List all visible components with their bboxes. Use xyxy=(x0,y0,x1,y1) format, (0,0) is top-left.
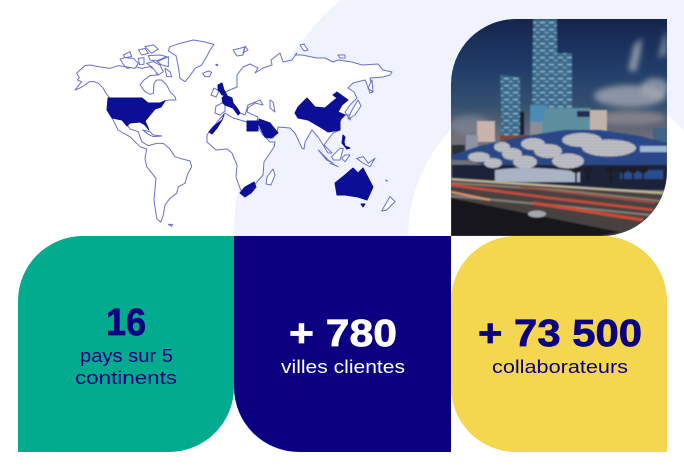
map: highlighted countries xyxy=(107,83,373,207)
map: Africa xyxy=(207,113,275,195)
map: Northern islands and inland seas xyxy=(211,44,345,112)
map: Madagascar xyxy=(266,169,275,185)
label: villes clientes: villes clientes xyxy=(281,356,405,377)
label: pays sur 5 continents xyxy=(75,345,177,388)
map: North America xyxy=(75,40,218,103)
photo: road with light trails xyxy=(451,178,667,236)
map: Japan and Korea xyxy=(348,80,373,119)
photo: clouds xyxy=(450,30,669,135)
photo: station roof xyxy=(452,130,667,190)
background shape: lavender arc xyxy=(234,0,684,236)
photo: city skyline with station at dusk xyxy=(450,19,669,236)
world map xyxy=(75,40,395,226)
photo: towers xyxy=(452,19,667,158)
map: Indonesia and New Guinea xyxy=(318,148,395,211)
number: + 73 500: + 73 500 xyxy=(478,313,642,355)
panel: countries stat xyxy=(18,236,234,452)
map: Central and South America xyxy=(112,118,192,226)
label: pays sur 5 continents: pays sur 5 xyxy=(80,345,173,366)
number: 16: 16 xyxy=(106,302,146,344)
panel: employees stat xyxy=(451,236,667,452)
label: pays sur 5 continents: continents xyxy=(75,367,177,388)
number: + 780: + 780 xyxy=(289,313,397,355)
map: Eurasia xyxy=(215,53,392,153)
label: collaborateurs: collaborateurs xyxy=(492,356,628,377)
panel: cities stat xyxy=(234,236,451,452)
